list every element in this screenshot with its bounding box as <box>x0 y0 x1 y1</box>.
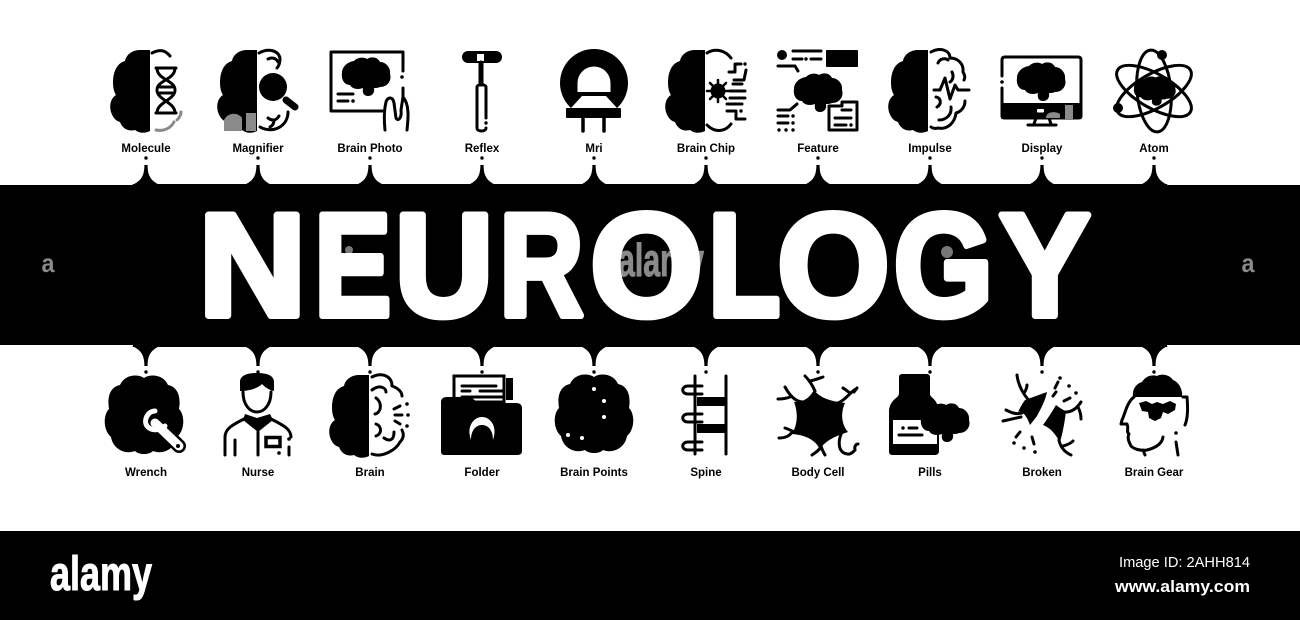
top connectors <box>132 156 1168 185</box>
label: nurse: Nurse <box>242 467 274 479</box>
watermark: band centre: alamy <box>618 234 704 286</box>
icon: brain gear <box>1121 375 1188 455</box>
icon: molecule <box>110 50 181 133</box>
icon: impulse <box>888 50 969 133</box>
footer image id: Image ID: 2AHH814 <box>1119 554 1250 571</box>
watermark: band right: a <box>1242 248 1255 278</box>
icon: brain points <box>555 375 633 453</box>
label: impulse: Impulse <box>908 143 952 155</box>
label: wrench: Wrench <box>125 467 167 479</box>
label: brain photo: Brain Photo <box>337 143 403 155</box>
icon: folder <box>441 376 522 455</box>
icon: broken neuron <box>1003 375 1081 455</box>
label: spine: Spine <box>690 467 722 479</box>
icon: nurse <box>225 373 291 455</box>
watermark: band left: a <box>42 248 55 278</box>
icon: wrench <box>105 376 183 454</box>
label: brain chip: Brain Chip <box>677 143 735 155</box>
icon: body cell <box>778 376 858 455</box>
label: magnifier: Magnifier <box>232 143 284 155</box>
label: brain points: Brain Points <box>560 467 628 479</box>
icon: brain chip <box>665 50 747 133</box>
title: O <box>590 183 703 347</box>
label: pills: Pills <box>918 467 942 479</box>
title <box>199 183 1090 348</box>
title: Y <box>999 183 1090 346</box>
title: N <box>199 185 306 347</box>
label: reflex: Reflex <box>465 143 500 155</box>
watermark: specks behind title <box>345 246 953 258</box>
icon: spine <box>683 376 726 454</box>
title: G <box>894 185 993 347</box>
label: feature: Feature <box>797 143 839 155</box>
icon: pills <box>889 374 970 455</box>
footer logo: alamy <box>50 548 152 601</box>
footer bar <box>0 531 1300 620</box>
label: brain gear: Brain Gear <box>1125 467 1184 479</box>
icon: display <box>1000 57 1081 125</box>
label: molecule: Molecule <box>121 143 171 155</box>
title: O <box>777 183 890 347</box>
label: folder: Folder <box>464 467 500 479</box>
icon: brain photo <box>331 52 408 130</box>
label: body cell: Body Cell <box>791 467 845 479</box>
icon: atom <box>1109 49 1199 133</box>
title band <box>0 184 1300 347</box>
label: mri: Mri <box>585 143 603 155</box>
label: broken: Broken <box>1022 467 1062 479</box>
icon: mri scanner <box>560 49 628 131</box>
title: U <box>395 183 493 346</box>
icon: reflex hammer <box>462 51 502 131</box>
title: L <box>708 185 780 347</box>
bottom connectors <box>132 346 1168 374</box>
icon: brain <box>329 375 410 458</box>
label: display: Display <box>1022 143 1063 155</box>
title: E <box>314 183 391 347</box>
label: brain: Brain <box>355 467 385 479</box>
title: R <box>499 184 584 348</box>
icon: feature <box>777 50 858 132</box>
icon: magnifier <box>217 50 295 133</box>
label: atom: Atom <box>1139 143 1169 155</box>
footer url: www.alamy.com <box>1114 577 1250 596</box>
